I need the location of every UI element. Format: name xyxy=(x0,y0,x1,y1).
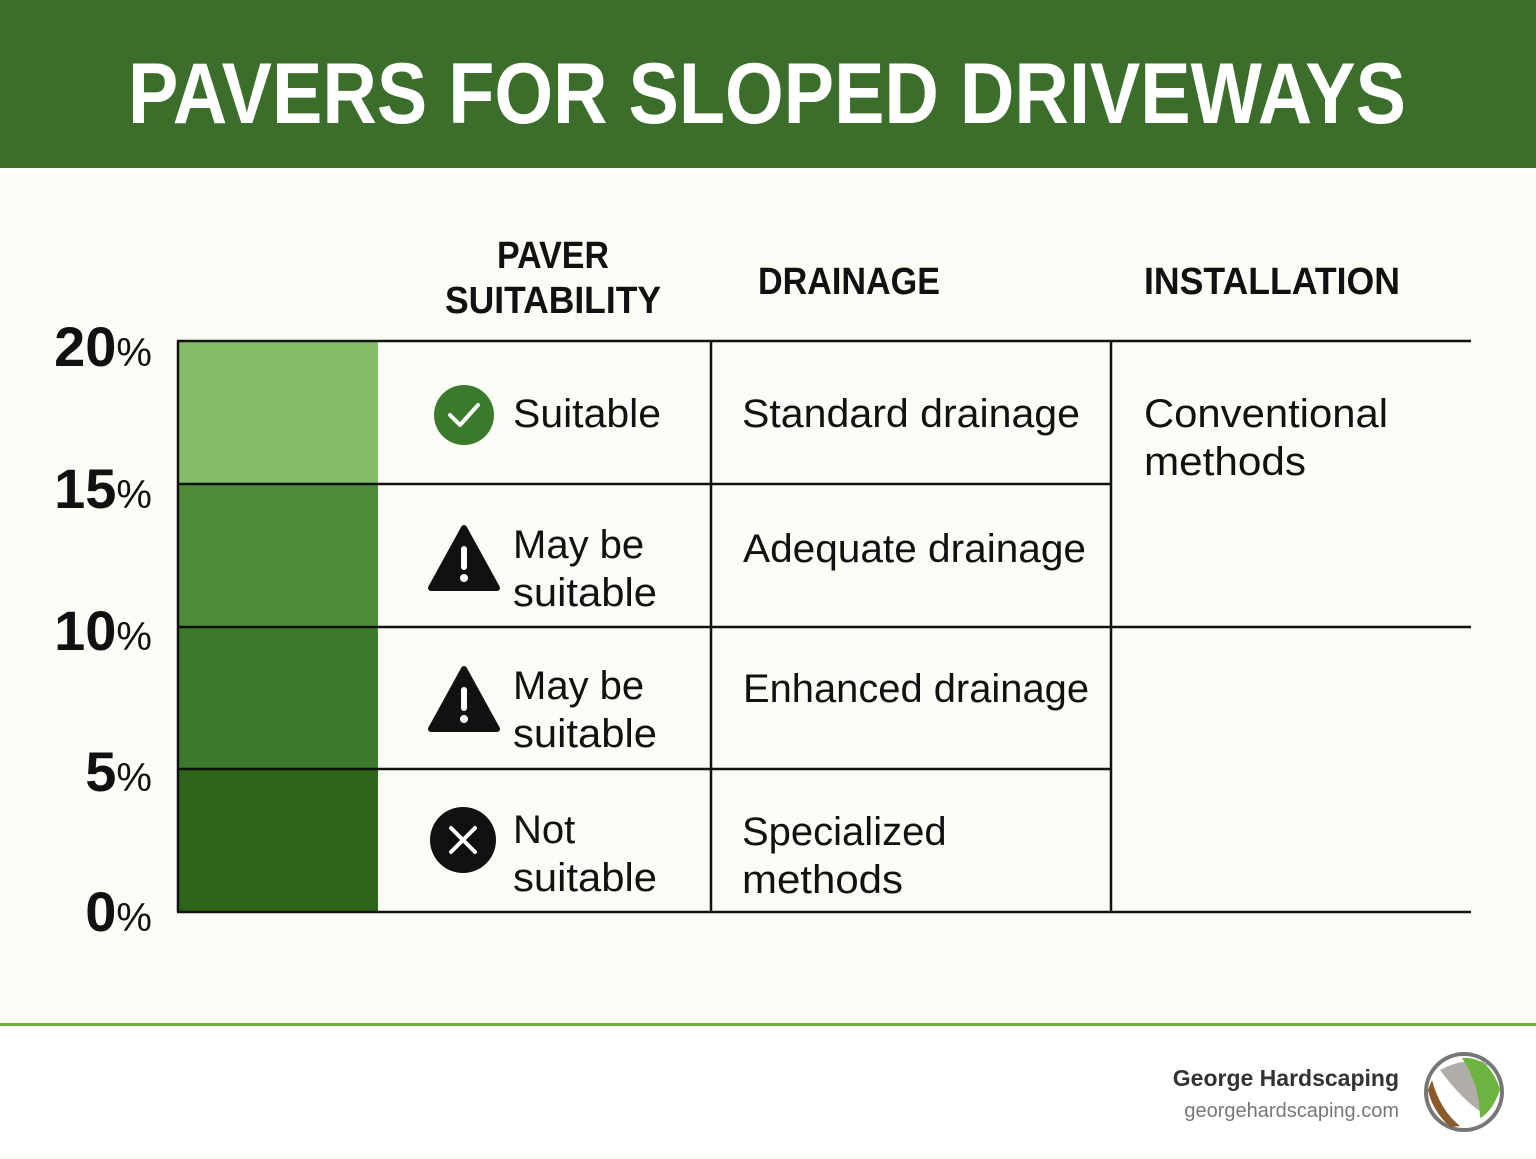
icon: warning 1 xyxy=(431,528,497,588)
icon: check xyxy=(434,385,494,445)
suitability text: Not xyxy=(513,808,575,852)
column headings xyxy=(445,235,1400,322)
suitability text: suitable xyxy=(513,856,657,900)
suitability text: Suitable xyxy=(513,392,661,436)
suitability text: May be xyxy=(513,523,644,567)
suitability text xyxy=(513,392,661,900)
drainage text: methods xyxy=(742,858,903,902)
column headings: PAVER xyxy=(497,235,609,277)
brand text: George Hardscaping xyxy=(1173,1065,1399,1091)
column headings: DRAINAGE xyxy=(758,261,940,303)
installation text: methods xyxy=(1144,440,1306,484)
footer: georgehardscaping.com xyxy=(1184,1100,1399,1122)
installation text: Conventional xyxy=(1144,392,1388,436)
column headings: SUITABILITY xyxy=(445,280,661,322)
table grid xyxy=(177,341,1471,912)
drainage text xyxy=(742,392,1089,902)
y-axis labels: 5% xyxy=(85,740,152,803)
footer xyxy=(0,1023,1536,1154)
suitability text: May be xyxy=(513,664,644,708)
suitability text: suitable xyxy=(513,571,657,615)
y-axis labels: 20% xyxy=(54,315,152,378)
icon: warning 2 xyxy=(431,669,497,729)
y-axis labels: 0% xyxy=(85,880,152,943)
drainage text: Adequate drainage xyxy=(743,527,1086,571)
logo xyxy=(1426,1054,1502,1130)
icon: cross xyxy=(430,807,496,873)
y-axis labels: 15% xyxy=(54,457,152,520)
header banner xyxy=(0,0,1536,168)
drainage text: Enhanced drainage xyxy=(743,667,1089,711)
column headings: INSTALLATION xyxy=(1144,261,1400,303)
y-axis labels: 10% xyxy=(54,599,152,662)
suitability text: suitable xyxy=(513,712,657,756)
y-axis labels xyxy=(54,315,152,943)
installation text xyxy=(1144,392,1388,484)
drainage text: Specialized xyxy=(742,810,947,854)
slope bar xyxy=(178,341,378,911)
drainage text: Standard drainage xyxy=(742,392,1080,436)
